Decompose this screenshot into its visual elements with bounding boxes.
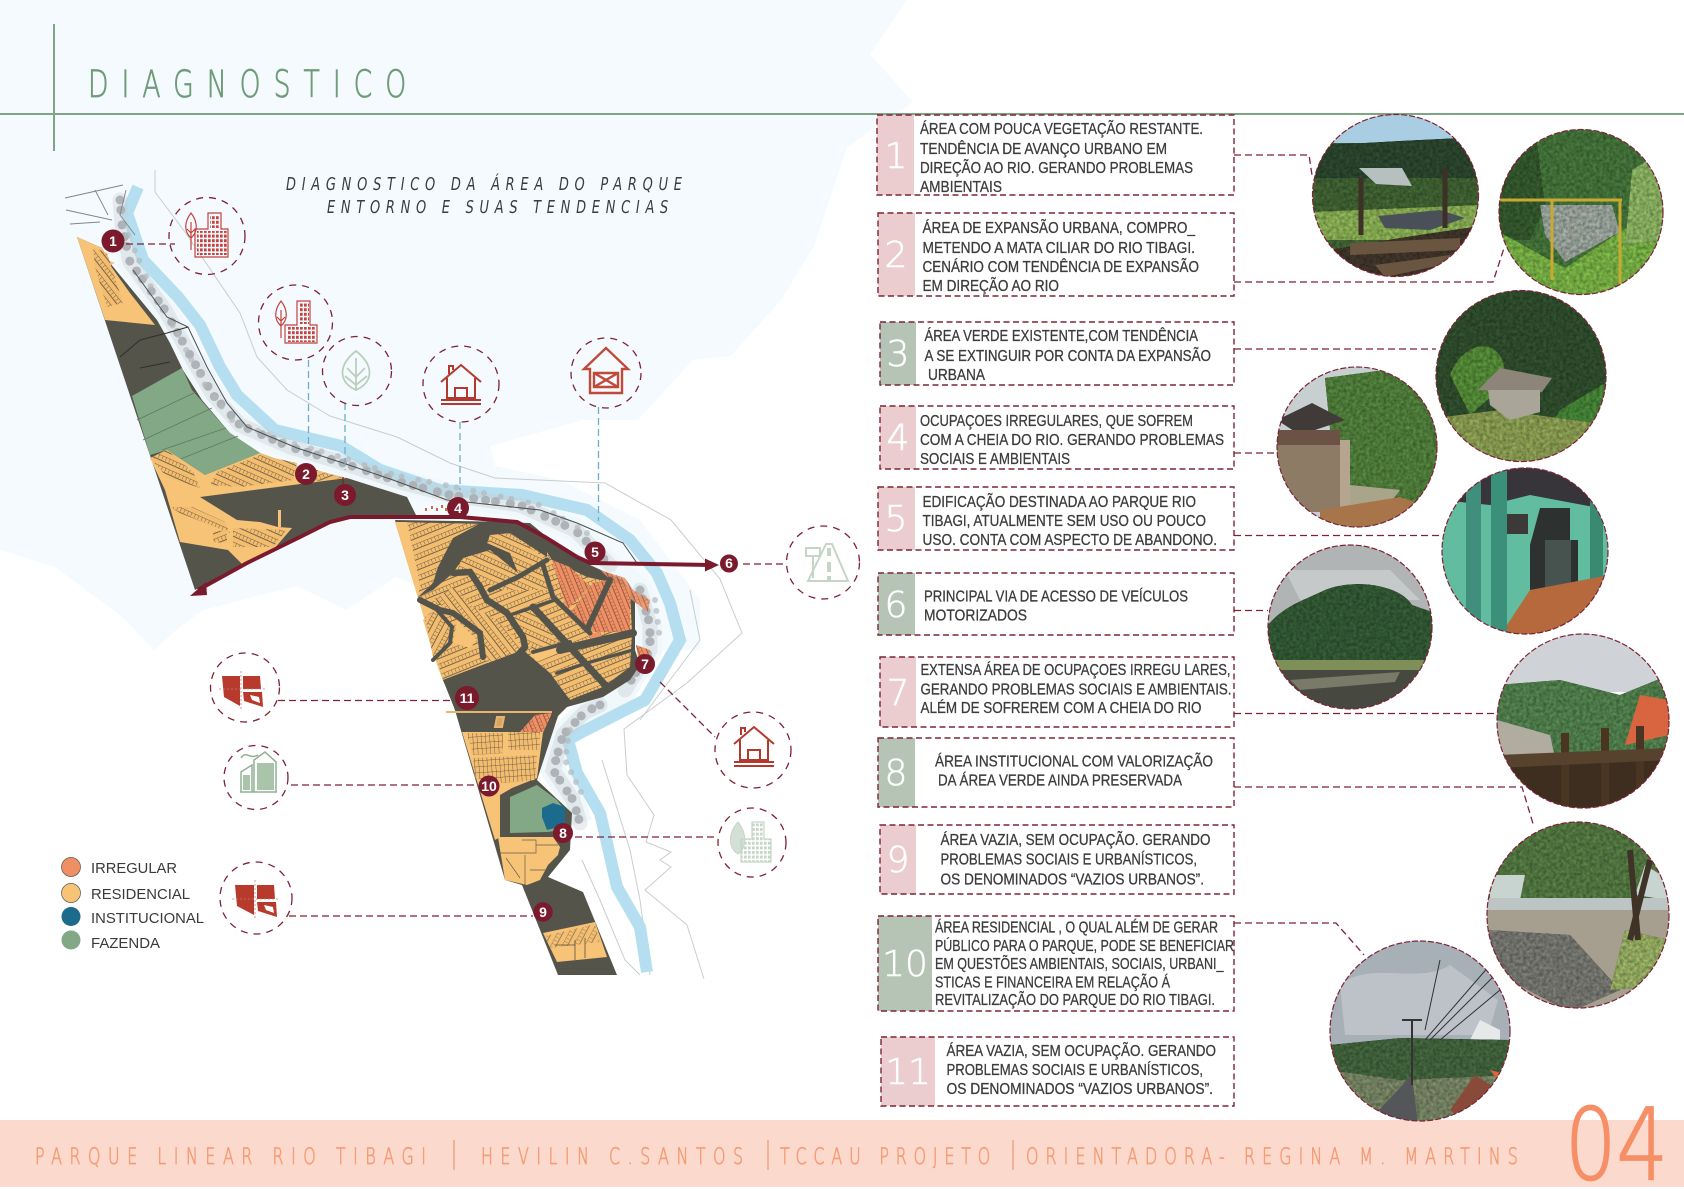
location markers: 8: [559, 825, 567, 841]
item 9: 9: [887, 840, 909, 881]
footer credits: ORIENTADORA- REGINA M. MARTINS: [1026, 1143, 1518, 1170]
item 6: PRINCIPAL VIA DE ACESSO DE VEÍCULOS: [924, 586, 1188, 606]
item 3: URBANA: [928, 367, 985, 384]
background wash: [0, 0, 913, 650]
item 3: A SE EXTINGUIR POR CONTA DA EXPANSÃO: [924, 345, 1211, 365]
photo 1: river view with debris: [1310, 110, 1480, 280]
item 7: EXTENSA ÁREA DE OCUPAÇOES IRREGU LARES,: [920, 660, 1230, 679]
item 4: SOCIAIS E AMBIENTAIS: [920, 451, 1070, 468]
icon: vacant lot 9: [220, 862, 292, 934]
contour lines: [155, 170, 742, 979]
internal roads: [420, 560, 633, 687]
icon: vacant lot 11: [210, 653, 280, 722]
icon: leaf: [322, 336, 392, 406]
item 1: AMBIENTAIS: [920, 179, 1002, 196]
photo 7: hills, fence and roofs: [1495, 632, 1671, 812]
lower residential: [498, 837, 560, 885]
item 6: MOTORIZADOS: [924, 608, 1027, 624]
icon: city and tree 1: [169, 198, 245, 274]
item 10: REVITALIZAÇÃO DO PARQUE DO RIO TIBAGI.: [935, 989, 1215, 1009]
location markers: 5: [591, 544, 599, 560]
river bank line: [133, 270, 637, 563]
subtitle: DIAGNOSTICO DA ÁREA DO PARQUE: [286, 173, 682, 195]
residential lower: [150, 450, 347, 565]
header rule lines: [0, 24, 1684, 151]
item 7: 7: [887, 673, 909, 714]
item 4: [880, 406, 1234, 469]
institutional compound: [510, 785, 565, 833]
item 8: DA ÁREA VERDE AINDA PRESERVADA: [938, 770, 1182, 790]
mid residential: [462, 732, 543, 840]
farm green: [132, 368, 260, 475]
item 11: OS DENOMINADOS “VAZIOS URBANOS”.: [946, 1081, 1213, 1098]
location markers: 6: [725, 555, 733, 571]
icon: abandoned house: [571, 338, 641, 408]
item 2: METENDO A MATA CILIAR DO RIO TIBAGI.: [922, 240, 1195, 257]
icon: flooded house 2: [715, 712, 791, 788]
legend: [62, 858, 204, 952]
icon: flooded house 1: [423, 346, 499, 422]
box connectors: [1234, 155, 1534, 955]
main road arrow: [190, 517, 719, 596]
riparian trees: [120, 200, 660, 823]
dark swath: [418, 522, 547, 597]
location markers: 4: [454, 500, 462, 516]
location markers: 1: [109, 233, 117, 249]
southern residential: [543, 922, 607, 962]
icon: faded city and tree: [718, 808, 786, 877]
institutional building: [542, 803, 565, 830]
footer credits: TCCAU PROJETO: [780, 1143, 990, 1170]
location markers: [102, 230, 738, 922]
map: [65, 170, 860, 979]
item 7: ALÉM DE SOFREREM COM A CHEIA DO RIO: [920, 698, 1202, 717]
item 11: ÁREA VAZIA, SEM OCUPAÇÃO. GERANDO: [946, 1040, 1216, 1060]
item 6: 6: [885, 585, 907, 626]
photo 6: trees under cloudy sky: [1265, 543, 1435, 712]
location markers: 2: [302, 466, 310, 482]
photo 5: abandoned teal building: [1440, 465, 1610, 640]
item 1: ÁREA COM POUCA VEGETAÇÃO RESTANTE.: [920, 118, 1203, 138]
item 2: 2: [885, 235, 907, 276]
item 3: [880, 322, 1234, 385]
river: [127, 187, 680, 972]
subtitle: ENTORNO E SUAS TENDENCIAS: [327, 196, 668, 218]
photo 8: park trees and road: [1485, 820, 1671, 1012]
item 10: STICAS E FINANCEIRA EM RELAÇÃO Á: [935, 972, 1170, 992]
item 8: 8: [885, 753, 907, 794]
vacant block line and parcel: [446, 712, 552, 727]
item 2: ÁREA DE EXPANSÃO URBANA, COMPRO_: [922, 217, 1196, 237]
location markers: 7: [641, 656, 649, 672]
legend: IRREGULAR: [91, 861, 177, 877]
connector dashes: [126, 244, 786, 916]
item 3: ÁREA VERDE EXISTENTE,COM TENDÊNCIA: [924, 326, 1198, 345]
item 2: EM DIREÇÃO AO RIO: [922, 275, 1059, 295]
photo 9: street with power lines: [1328, 940, 1512, 1125]
tree band background: [122, 225, 650, 823]
legend: FAZENDA: [91, 936, 160, 952]
item 9: OS DENOMINADOS “VAZIOS URBANOS”.: [940, 872, 1204, 888]
item 10: PÚBLICO PARA O PARQUE, PODE SE BENEFICIAR: [935, 936, 1234, 955]
item 9: PROBLEMAS SOCIAIS E URBANÍSTICOS,: [940, 850, 1197, 868]
item 2: [878, 213, 1234, 296]
item 3: 3: [887, 334, 909, 375]
item 9: ÁREA VAZIA, SEM OCUPAÇÃO. GERANDO: [940, 829, 1210, 849]
item 10: ÁREA RESIDENCIAL , O QUAL ALÉM DE GERAR: [935, 918, 1218, 936]
photo 4: wall and trees: [1275, 365, 1440, 530]
footer credits: [35, 1140, 1518, 1170]
item 5: [878, 487, 1234, 550]
item 8: ÁREA INSTITUCIONAL COM VALORIZAÇÃO: [935, 750, 1213, 770]
footer band: [0, 1120, 1684, 1187]
legend: INSTITUCIONAL: [91, 911, 204, 927]
tract directions: [425, 533, 566, 663]
thin road lines: [120, 327, 188, 368]
icon: city and tree 2: [258, 285, 332, 360]
item 9: [880, 825, 1234, 894]
item 5: TIBAGI, ATUALMENTE SEM USO OU POUCO: [922, 513, 1206, 530]
item 5: 5: [885, 499, 907, 540]
title: DIAGNOSTICO: [88, 63, 406, 106]
legend: RESIDENCIAL: [91, 887, 190, 903]
item 7: [880, 657, 1234, 727]
item 10: EM QUESTÕES AMBIENTAIS, SOCIAIS, URBANI_: [935, 953, 1224, 973]
vacant block: [443, 650, 570, 730]
item 4: COM A CHEIA DO RIO. GERANDO PROBLEMAS: [920, 432, 1224, 449]
item 5: EDIFICAÇÃO DESTINADA AO PARQUE RIO: [922, 491, 1196, 511]
item 1: TENDÊNCIA DE AVANÇO URBANO EM: [920, 139, 1167, 158]
residential top: [77, 237, 155, 325]
item 11: [881, 1037, 1234, 1106]
item 10: 10: [882, 944, 928, 985]
footer credits: PARQUE LINEAR RIO TIBAGI: [35, 1143, 426, 1170]
location markers: 3: [341, 487, 349, 503]
residential base: [395, 522, 632, 700]
land: north wedge: [77, 237, 417, 590]
item 2: CENÁRIO COM TENDÊNCIA DE EXPANSÃO: [922, 256, 1199, 276]
item 1: [877, 115, 1234, 196]
footer credits: HEVILIN C.SANTOS: [481, 1143, 743, 1170]
location markers: 11: [460, 690, 475, 706]
item 1: 1: [885, 136, 907, 177]
icon: green buildings: [224, 746, 288, 810]
item 4: 4: [887, 418, 909, 459]
photo 2: river and yellow fence: [1495, 128, 1667, 298]
land: south section: [395, 520, 650, 975]
item 5: USO. CONTA COM ASPECTO DE ABANDONO.: [922, 532, 1217, 549]
subtitle: [286, 173, 682, 218]
item 4: OCUPAÇOES IRREGULARES, QUE SOFREM: [920, 413, 1193, 430]
item 11: 11: [885, 1052, 931, 1093]
photo 3: house in forest: [1435, 290, 1610, 465]
item 1: DIREÇÃO AO RIO. GERANDO PROBLEMAS: [920, 157, 1193, 177]
street lines north: [65, 185, 135, 235]
irregular tracts: [520, 560, 650, 733]
left plain strip: [395, 522, 443, 680]
small houses near marker 4: [425, 505, 447, 511]
item 6: [878, 573, 1234, 635]
location markers: 10: [481, 778, 497, 794]
icon: road and sign: [786, 526, 860, 599]
item 10: [878, 916, 1234, 1011]
item 11: PROBLEMAS SOCIAIS E URBANÍSTICOS,: [946, 1060, 1203, 1079]
location markers: 9: [539, 904, 547, 920]
item 8: [878, 738, 1234, 807]
item 7: GERANDO PROBLEMAS SOCIAIS E AMBIENTAIS.: [920, 682, 1232, 698]
